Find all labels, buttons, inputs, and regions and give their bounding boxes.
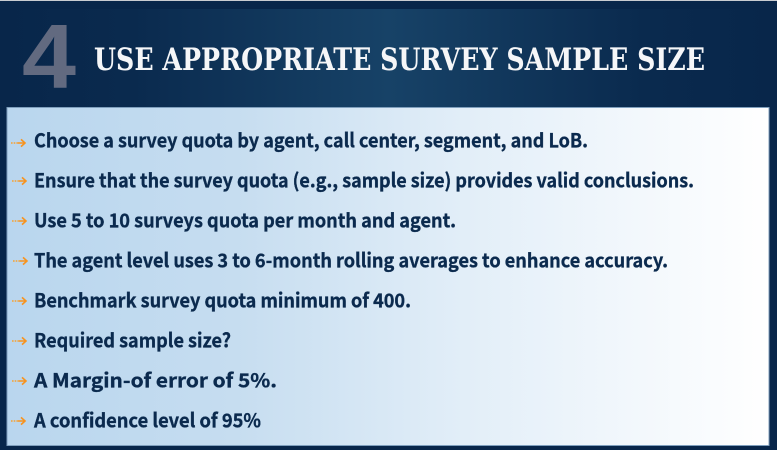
- bullet 7: A Margin-of error of 5%.: [33, 364, 277, 394]
- bullet 3: Use 5 to 10 surveys quota per month and agent.: [34, 204, 456, 234]
- bullet 6: Required sample size?: [34, 324, 231, 354]
- big number 4: 4: [22, 7, 76, 108]
- panel: survey guidelines: [7, 108, 769, 446]
- bullet 2: Ensure that the survey quota (e.g., sample size) provides valid conclusions.: [34, 164, 694, 194]
- bullet 8: A confidence level of 95%: [33, 404, 261, 434]
- bullet 1: Choose a survey quota by agent, call center, segment, and LoB.: [34, 124, 588, 154]
- bullet 4: The agent level uses 3 to 6-month rolling averages to enhance accuracy.: [34, 244, 668, 274]
- header band: [0, 9, 777, 107]
- bullet 5: Benchmark survey quota minimum of 400.: [34, 284, 411, 314]
